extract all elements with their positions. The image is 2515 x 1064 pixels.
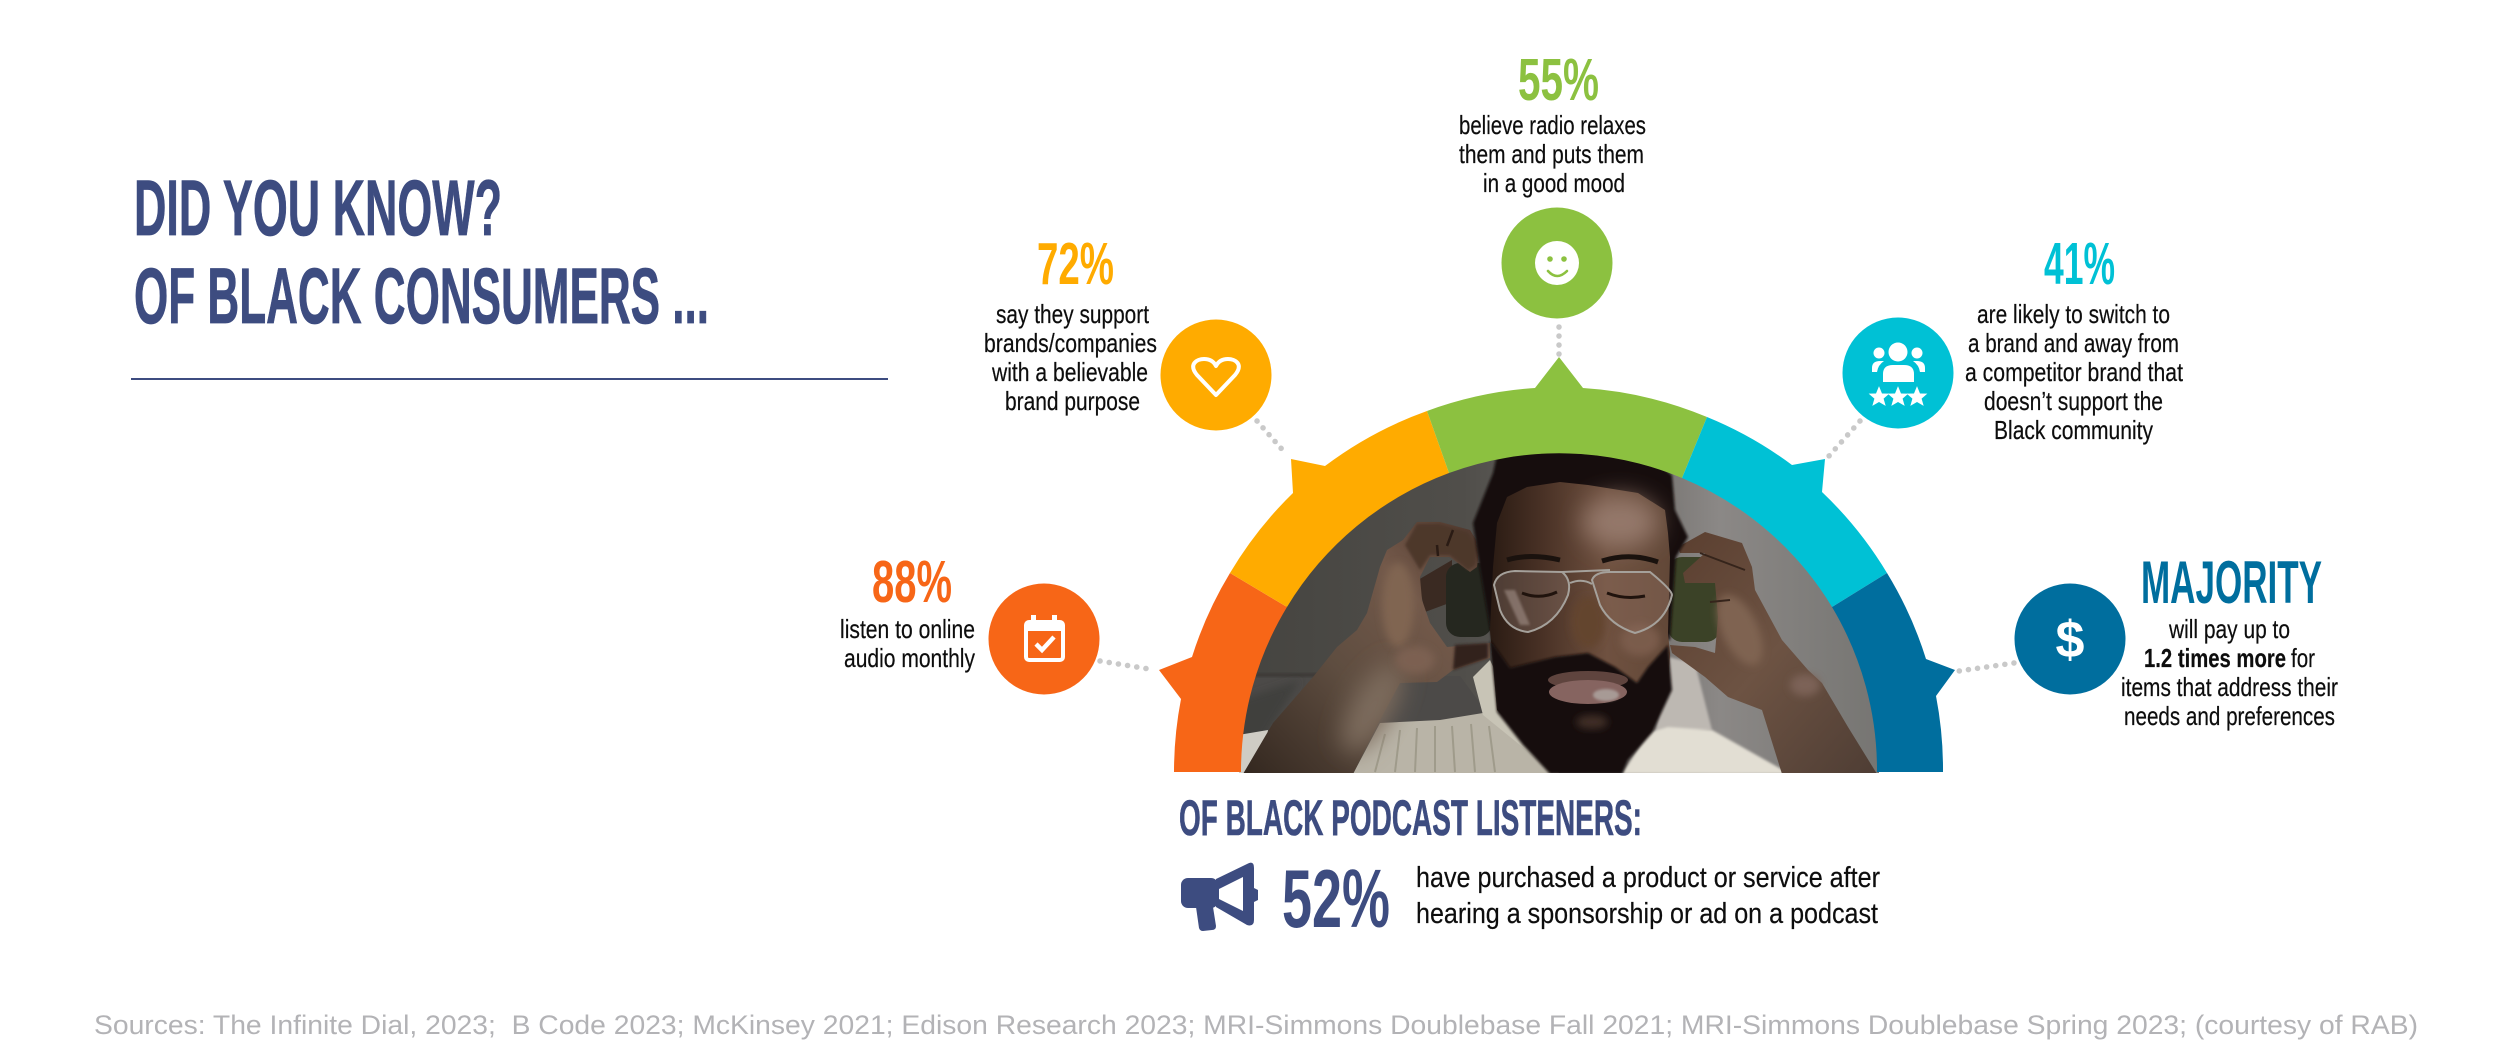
connector: orange dots (1100, 661, 1155, 670)
stat: 72%: 72% (1037, 231, 1114, 297)
semicircle photo: man listening with headphones (1238, 450, 1880, 775)
stat: 72%: with a believable (991, 357, 1148, 387)
stat: 88%: 88% (872, 549, 952, 615)
heading: of Black podcast listeners: OF BLACK PODCAST LISTENERS: (1179, 790, 1642, 846)
stat: majority: needs and preferences (2124, 701, 2335, 731)
stat: 52%: have purchased a product or service after (1416, 862, 1880, 894)
stat: 72% (984, 231, 1157, 416)
stat: majority: 1.2 times more (2144, 643, 2286, 673)
arc segment: yellow (1230, 411, 1449, 607)
stat: 41%: doesn’t support the (1984, 386, 2163, 416)
connector: blue dots (1959, 663, 2014, 671)
stat: 52%: 52% (1282, 852, 1390, 945)
stat: 72%: brands/companies (984, 328, 1157, 358)
stat: 55%: in a good mood (1483, 168, 1625, 198)
icon: megaphone (1181, 863, 1258, 931)
title: OF BLACK CONSUMERS ... (134, 251, 709, 340)
stat: majority: for (2291, 643, 2315, 673)
stat: 41%: a competitor brand that (1965, 357, 2184, 387)
connector: cyan dots (1829, 421, 1860, 456)
icon: people with stars (1842, 318, 1954, 428)
stat: 55%: 55% (1518, 47, 1599, 113)
stat: 41%: a brand and away from (1968, 328, 2179, 358)
stat: 41% (1965, 231, 2184, 445)
icon: dollar sign: $ (2056, 611, 2085, 669)
stat: majority: will pay up to (2168, 614, 2290, 644)
stat: 52%: hearing a sponsorship or ad on a podcast (1416, 898, 1878, 930)
icon: smiley face (1502, 208, 1612, 318)
stat: 41%: Black community (1994, 415, 2153, 445)
stat: majority (2121, 549, 2338, 731)
stat: 55%: them and puts them (1459, 139, 1644, 169)
stat: majority: items that address their (2121, 672, 2338, 702)
arc segment: cyan (1682, 417, 1887, 607)
stat: 41%: 41% (2044, 231, 2115, 297)
arc segment: orange (1159, 573, 1287, 772)
arc segment: blue (1832, 573, 1955, 772)
connector: yellow dots (1257, 421, 1287, 455)
stat: 55%: believe radio relaxes (1459, 110, 1646, 140)
stat: 88%: audio monthly (844, 643, 975, 673)
stat: 88% (840, 549, 975, 673)
stat: 72%: brand purpose (1005, 386, 1140, 416)
icon: heart (1160, 320, 1272, 430)
title (134, 163, 709, 340)
stat: majority: MAJORITY (2141, 549, 2322, 616)
stat: 72%: say they support (996, 299, 1150, 329)
title: DID YOU KNOW? (134, 163, 502, 252)
icon: dollar sign (2014, 584, 2126, 694)
stat: 55% (1459, 47, 1646, 198)
arc segment: green (1427, 357, 1707, 478)
connector: green dots (1556, 327, 1562, 354)
stat: 88%: listen to online (840, 614, 975, 644)
stat: 52% (1282, 852, 1880, 945)
sources: Sources: The Infinite Dial, 2023; B Code 2023; McKinsey 2021; Edison Research 2023; MRI-Simmons Doublebase Fall 2021; MRI-Simmons Doublebase Spring 2023; (courtesy of RAB) (94, 1010, 2418, 1040)
stat: 41%: are likely to switch to (1977, 299, 2170, 329)
icon: calendar (988, 584, 1100, 694)
